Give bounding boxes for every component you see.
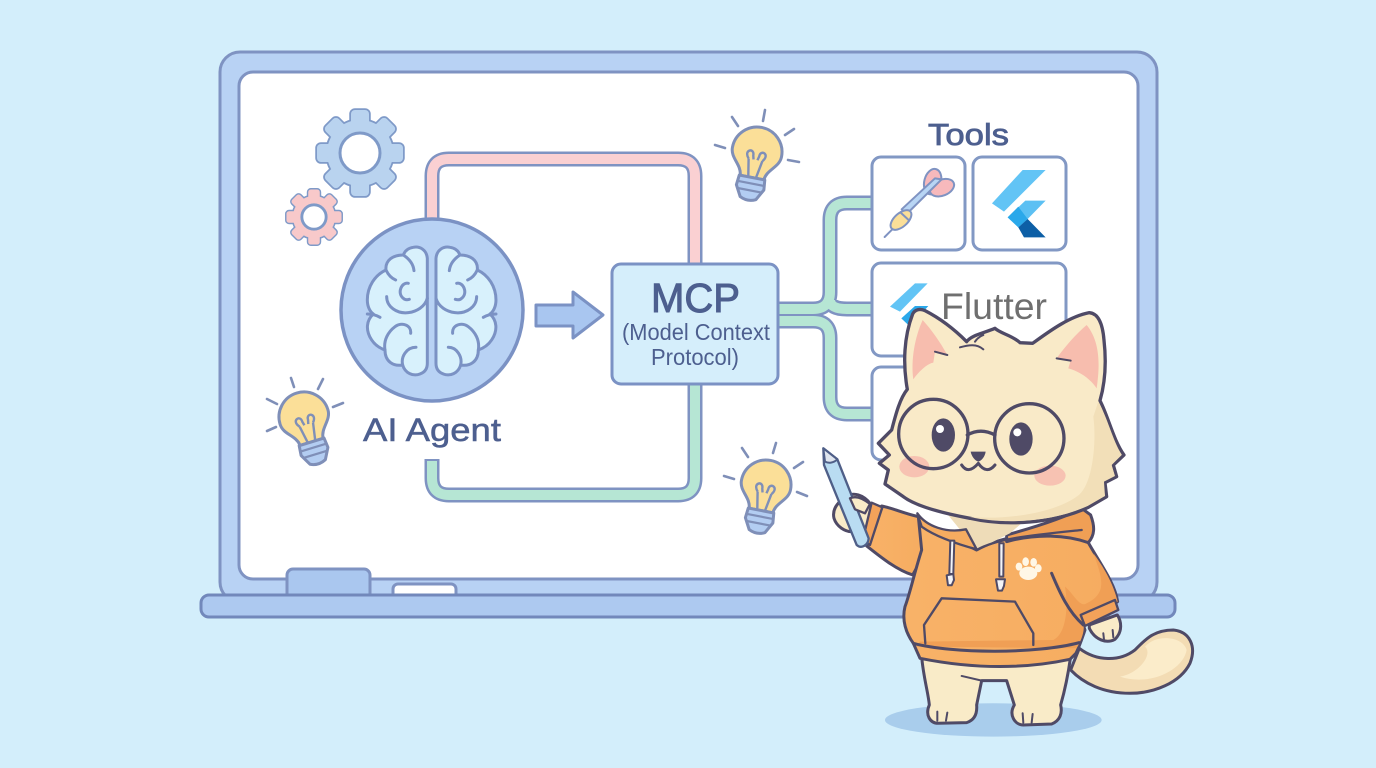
MCP heading: MCP	[651, 275, 740, 321]
Flutter wordmark text: Flutter	[941, 286, 1047, 327]
whiteboard frame	[220, 52, 1157, 602]
hoodie waistband	[913, 643, 1079, 651]
hoodie pocket	[924, 598, 1033, 645]
hood back right	[1007, 508, 1094, 543]
whiteboard surface	[239, 72, 1138, 579]
icon: large gear	[317, 110, 403, 196]
MCP box	[612, 264, 778, 384]
cat mascot	[823, 309, 1193, 737]
hood collar left	[917, 513, 977, 549]
nose and mouth	[962, 452, 995, 470]
connectors: MCP to tools	[778, 203, 873, 414]
finger on pen	[850, 497, 870, 513]
sleeve cuff raised	[863, 503, 882, 545]
icon: brain	[367, 247, 496, 375]
hoodie body	[904, 517, 1118, 667]
connector: pink loop from agent to MCP	[432, 159, 695, 264]
arrow: agent to MCP	[536, 292, 603, 338]
AI agent brain circle	[341, 219, 523, 401]
icon: small Flutter logo	[890, 283, 928, 327]
cat legs	[922, 657, 1071, 725]
paw print logo	[1016, 557, 1042, 580]
raised hand	[834, 494, 882, 545]
glasses	[899, 399, 1064, 473]
hoodie raised arm	[867, 506, 927, 575]
cat toes	[937, 676, 1033, 723]
icon: dart	[885, 167, 957, 237]
tray	[201, 595, 1175, 617]
MCP subtitle line 2: Protocol)	[651, 344, 739, 370]
icon: left lightbulb	[267, 378, 343, 471]
eraser	[287, 569, 370, 601]
hoodie sleeve cuff	[1081, 600, 1118, 626]
whiteboard	[201, 52, 1175, 617]
sleeve seam	[1052, 573, 1083, 625]
icon: lower lightbulb	[724, 443, 807, 538]
connector: green loop from MCP to agent	[432, 383, 695, 495]
hoodie right paw	[1089, 615, 1121, 641]
heading: Tools: Tools	[928, 117, 1009, 152]
cat head	[878, 309, 1124, 523]
eyes	[932, 418, 1033, 456]
pen	[823, 448, 869, 547]
icon: Flutter logo	[992, 170, 1046, 237]
drawstring right	[996, 543, 1005, 591]
tool card: partly hidden	[872, 367, 1066, 460]
head shading	[970, 402, 1122, 521]
neck	[947, 513, 1033, 550]
right inner ear	[1057, 325, 1099, 388]
hoodie collar line	[977, 530, 1082, 550]
cheek blush	[899, 456, 929, 477]
cat tail	[1071, 630, 1193, 693]
label: AI Agent: AI Agent	[363, 412, 501, 448]
icon: top lightbulb	[715, 110, 799, 205]
fur tuft lines	[935, 335, 1071, 361]
MCP subtitle line 1: (Model Context	[622, 319, 771, 345]
left inner ear	[913, 320, 947, 379]
drawstring left	[947, 541, 954, 585]
tool card: dart	[872, 157, 965, 250]
hoodie shading	[917, 553, 1118, 648]
cat ground shadow	[885, 703, 1102, 737]
tool card: Flutter logo	[973, 157, 1066, 250]
icon: small gear	[286, 189, 342, 245]
tool card: Flutter wordmark	[872, 263, 1066, 356]
marker	[393, 584, 456, 602]
